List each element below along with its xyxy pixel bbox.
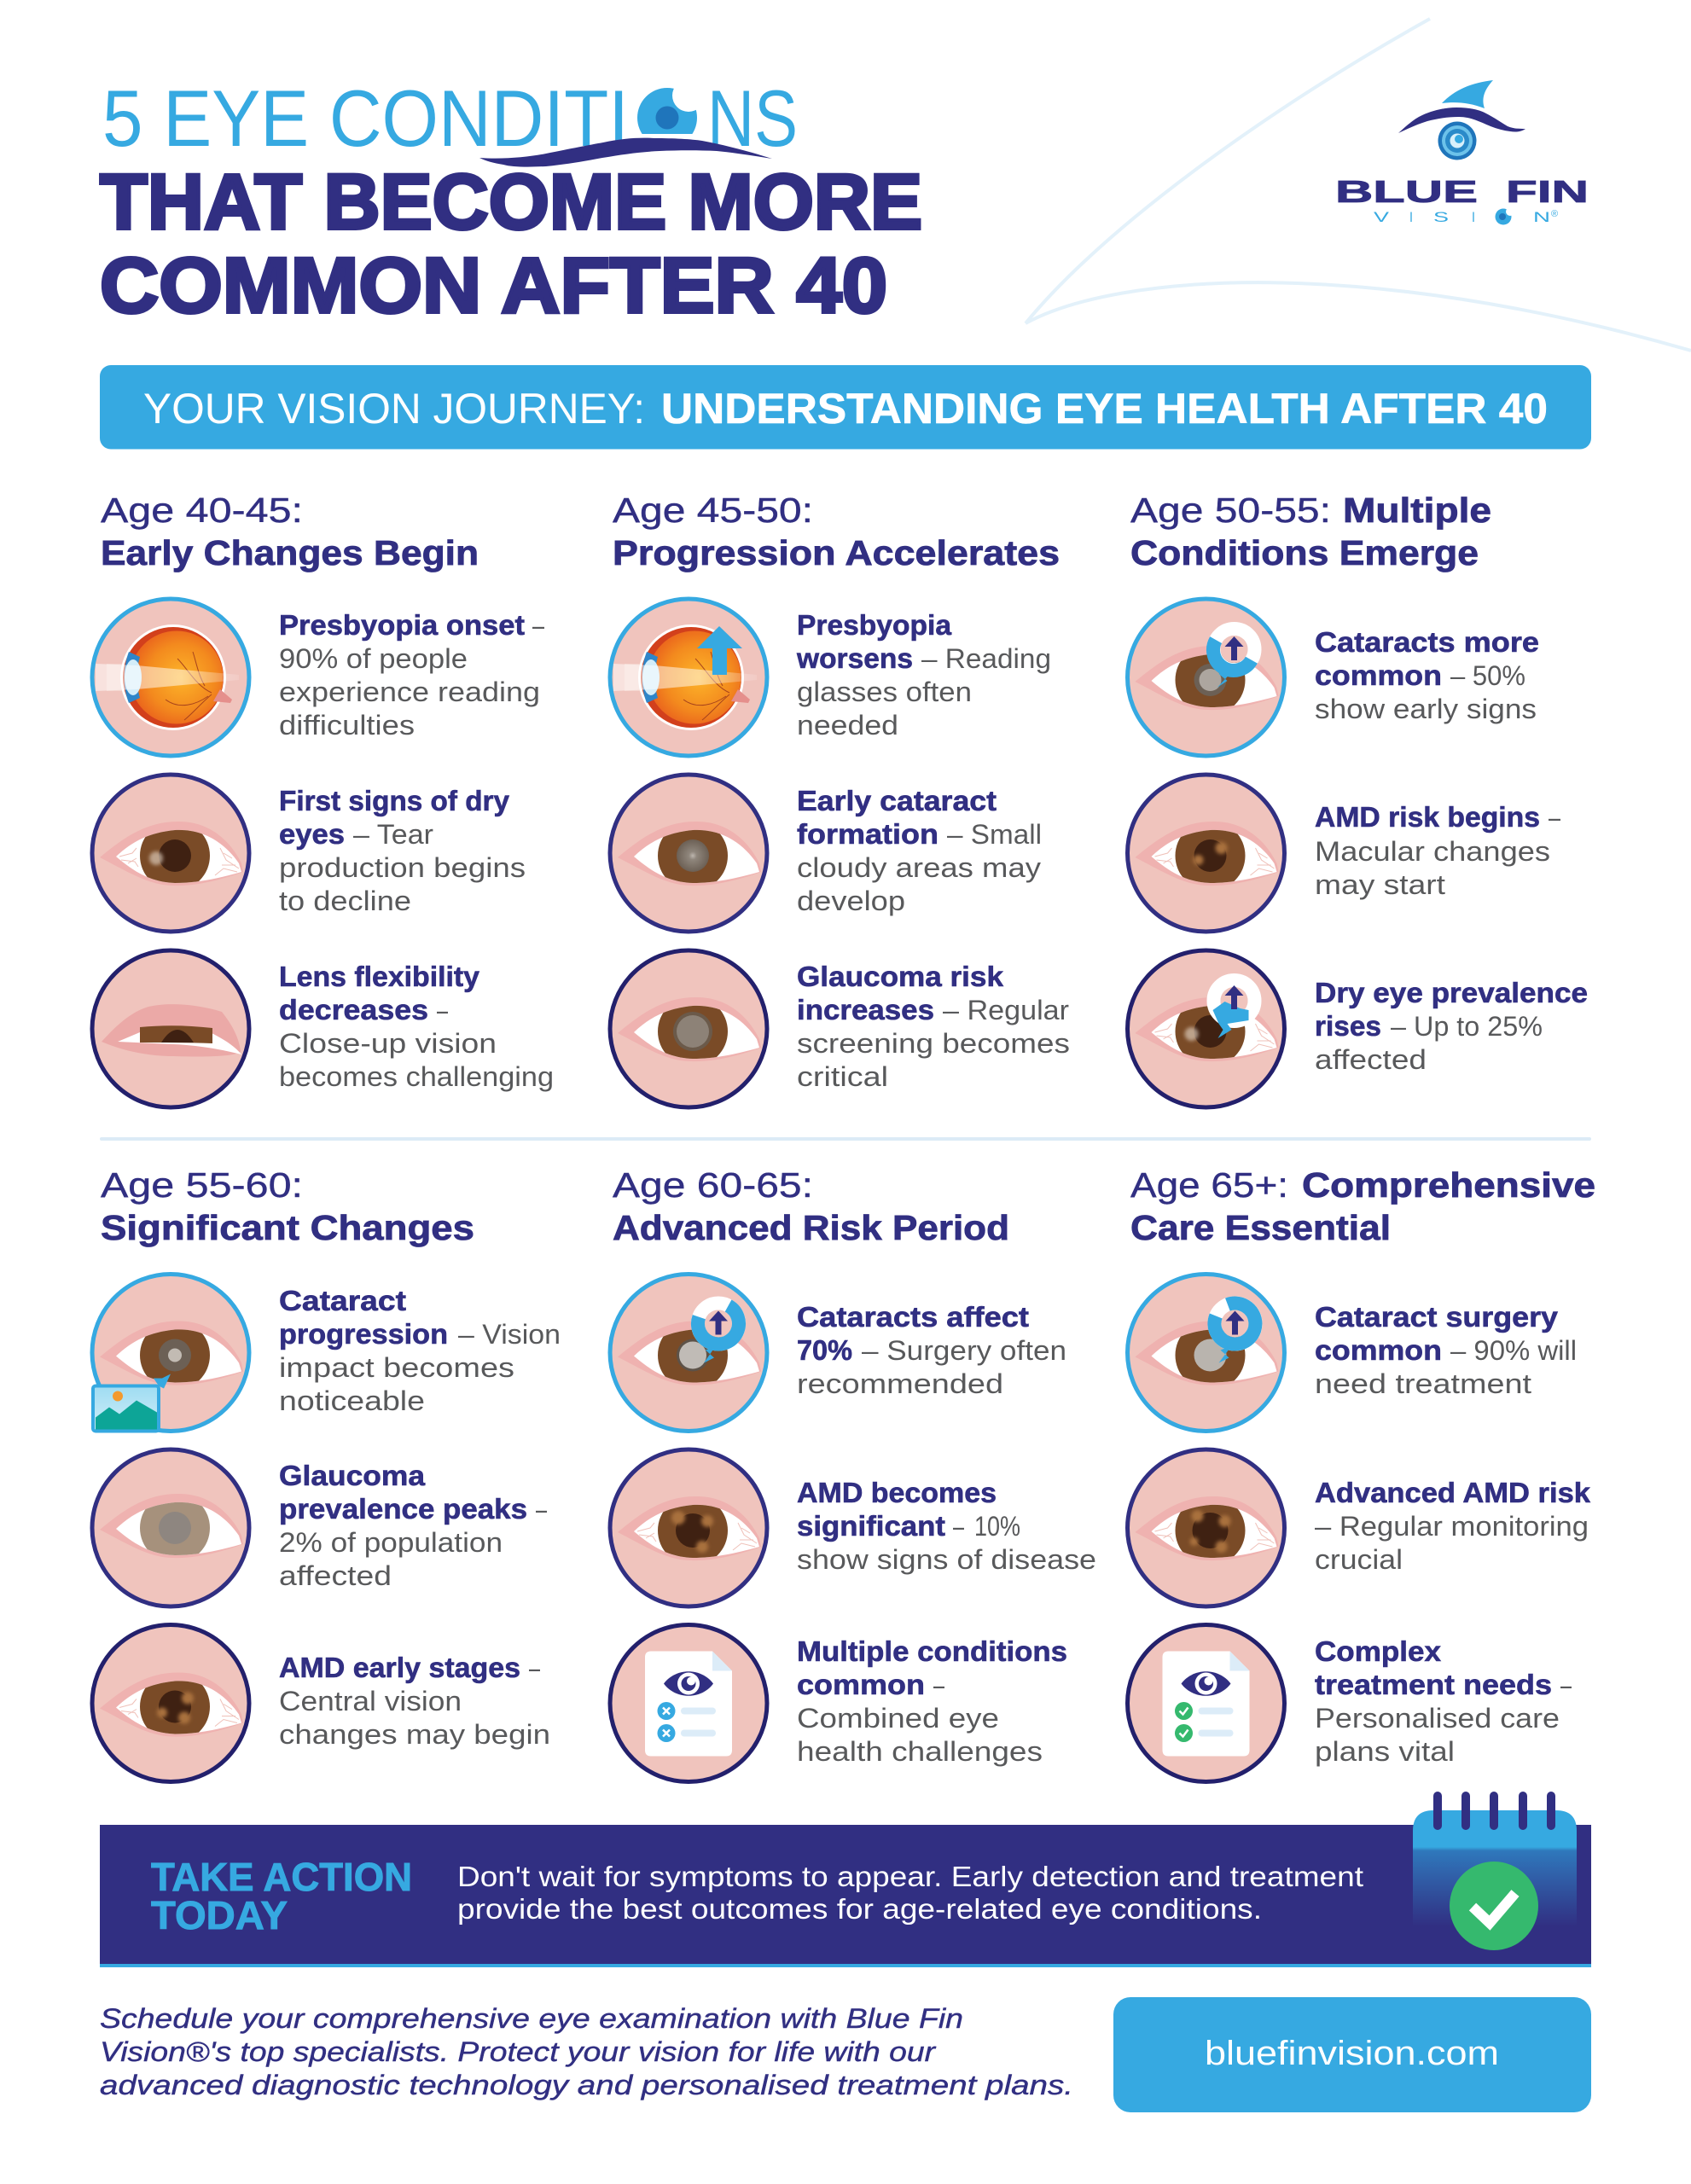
heading bbox=[613, 491, 1060, 572]
icon: cataract eye with 90 percent ring bbox=[1128, 1275, 1285, 1432]
text: cataract surgery common: common bbox=[1315, 1334, 1442, 1366]
panel: age 65+ bbox=[1128, 1165, 1595, 1781]
text: advanced AMD risk: crucial bbox=[1315, 1544, 1403, 1575]
heading: Early Changes Begin bbox=[101, 533, 479, 572]
panel: age 40-45 bbox=[92, 491, 554, 1107]
text: cataract surgery common: – 90% will bbox=[1450, 1335, 1577, 1366]
text: lens flexibility decreases: – bbox=[437, 995, 448, 1025]
text: presbyopia onset: 90% of people bbox=[279, 643, 468, 674]
text: first signs of dry eyes: – Tear bbox=[353, 819, 433, 850]
text: cataracts more common: Cataracts more bbox=[1315, 626, 1539, 658]
text: presbyopia onset: experience reading bbox=[279, 677, 540, 707]
text: call to action message: provide the best outcomes for age-related eye conditions. bbox=[457, 1893, 1262, 1925]
icon: half-closed eye bbox=[92, 950, 249, 1107]
icon: calendar with check bbox=[1413, 1796, 1577, 1950]
text: AMD risk begins: Macular changes bbox=[1315, 836, 1550, 867]
icon: iris bbox=[1438, 121, 1476, 160]
text: call to action message bbox=[457, 1861, 1363, 1925]
heading: Age 50-55: bbox=[1130, 491, 1331, 530]
text: glaucoma risk increases: screening becomes bbox=[797, 1028, 1070, 1059]
text: AMD risk begins: AMD risk begins bbox=[1315, 801, 1540, 833]
logo: Blue Fin Vision: I bbox=[1409, 209, 1413, 225]
text: cataracts more common: show early signs bbox=[1315, 694, 1537, 724]
text: glaucoma risk increases: increases bbox=[797, 994, 934, 1025]
logo: Blue Fin Vision bbox=[1335, 80, 1589, 225]
title: NS bbox=[707, 73, 798, 163]
icon: blurred picture inset bbox=[93, 1385, 159, 1432]
heading: Comprehensive bbox=[1302, 1165, 1595, 1205]
icon: AMD risk eye bbox=[1128, 775, 1285, 932]
text: multiple conditions common bbox=[797, 1635, 1067, 1767]
icon: cataract eye with 50 percent ring bbox=[1128, 599, 1285, 756]
logo: Blue Fin Vision: I bbox=[1472, 209, 1475, 225]
text: AMD becomes significant: – bbox=[953, 1511, 964, 1542]
icon: cataract eye with 70 percent ring bbox=[610, 1275, 767, 1432]
text: presbyopia worsens: worsens bbox=[796, 642, 913, 674]
text: early cataract formation: Early cataract bbox=[797, 785, 997, 816]
banner: UNDERSTANDING EYE HEALTH AFTER 40 bbox=[661, 385, 1548, 433]
text: schedule examination: Vision®'s top specialists. Protect your vision for life with our bbox=[100, 2036, 937, 2067]
text: presbyopia worsens: needed bbox=[797, 710, 898, 741]
text: lens flexibility decreases bbox=[279, 961, 554, 1092]
text: cataract progression bbox=[279, 1285, 561, 1416]
text: dry eye prevalence rises bbox=[1315, 977, 1588, 1075]
text: multiple conditions common: – bbox=[933, 1670, 944, 1700]
logo: Blue Fin Vision: S bbox=[1433, 209, 1449, 225]
heading: Age 45-50: bbox=[613, 491, 813, 530]
text: cataract progression: impact becomes bbox=[279, 1352, 514, 1383]
heading: Age 60-65: bbox=[613, 1165, 813, 1205]
icon: brow bbox=[1398, 107, 1525, 133]
text: presbyopia onset: difficulties bbox=[279, 710, 415, 741]
title wave bbox=[479, 138, 772, 167]
text: glaucoma prevalence peaks: Glaucoma bbox=[279, 1460, 426, 1491]
text: dry eye prevalence rises: Dry eye prevalence bbox=[1315, 977, 1588, 1008]
logo: Blue Fin Vision: FIN bbox=[1506, 174, 1589, 209]
heading bbox=[613, 1165, 1009, 1247]
text: glaucoma prevalence peaks: affected bbox=[279, 1560, 392, 1591]
text: glaucoma prevalence peaks: – bbox=[536, 1494, 547, 1525]
heading: take action today: TAKE ACTION bbox=[151, 1855, 412, 1899]
text: dry eye prevalence rises: – Up to 25% bbox=[1391, 1011, 1543, 1042]
heading: Age 40-45: bbox=[101, 491, 303, 530]
heading: Age 65+: bbox=[1130, 1165, 1288, 1205]
text: advanced AMD risk: – Regular monitoring bbox=[1315, 1511, 1589, 1542]
text: dry eye prevalence rises: rises bbox=[1315, 1010, 1381, 1042]
text: first signs of dry eyes: First signs of dry bbox=[279, 785, 510, 816]
text: cataracts more common: – 50% bbox=[1450, 660, 1525, 691]
icon: glaucoma risk eye bbox=[610, 950, 767, 1107]
text: glaucoma risk increases: critical bbox=[797, 1061, 888, 1092]
heading: Significant Changes bbox=[101, 1208, 474, 1247]
icon: anatomical eye with arrow bbox=[610, 599, 767, 756]
icon: droplet eye in title bbox=[633, 79, 705, 148]
text: cataract progression: – Vision bbox=[458, 1319, 561, 1350]
button: website: bluefinvision.com bbox=[1205, 2035, 1499, 2072]
text: cataracts affect 70%: recommended bbox=[797, 1368, 1003, 1399]
title: THAT BECOME MORE bbox=[100, 159, 922, 246]
logo: Blue Fin Vision: BLUE bbox=[1335, 174, 1478, 209]
text: early cataract formation bbox=[797, 785, 1042, 916]
heading: Advanced Risk Period bbox=[613, 1208, 1009, 1247]
text: glaucoma risk increases bbox=[797, 961, 1070, 1092]
text: AMD early stages: Central vision bbox=[279, 1686, 462, 1716]
text: cataracts affect 70%: – Surgery often bbox=[862, 1335, 1066, 1366]
title bbox=[100, 73, 922, 329]
text: cataract progression: noticeable bbox=[279, 1385, 425, 1416]
text: complex treatment needs bbox=[1315, 1635, 1572, 1767]
text: lens flexibility decreases: becomes challenging bbox=[279, 1061, 554, 1092]
text: glaucoma risk increases: – Regular bbox=[943, 995, 1069, 1025]
logo: Blue Fin Vision: ® bbox=[1551, 209, 1558, 219]
text: glaucoma risk increases: Glaucoma risk bbox=[797, 961, 1004, 992]
heading: Conditions Emerge bbox=[1130, 533, 1479, 572]
icon: AMD early stages eye bbox=[92, 1624, 249, 1781]
text: cataracts affect 70%: Cataracts affect bbox=[797, 1301, 1029, 1333]
text: cataracts affect 70%: 70% bbox=[797, 1334, 852, 1366]
text: cataracts more common: common bbox=[1315, 659, 1442, 691]
heading bbox=[1130, 491, 1491, 572]
title: COMMON AFTER 40 bbox=[100, 242, 887, 329]
icon: AMD significant eye bbox=[610, 1449, 767, 1606]
text: multiple conditions common: Combined eye bbox=[797, 1703, 999, 1734]
text: cataract progression: Cataract bbox=[279, 1285, 406, 1316]
text: cataract surgery common: need treatment bbox=[1315, 1368, 1531, 1399]
logo: Blue Fin Vision: N bbox=[1533, 209, 1550, 225]
text: AMD becomes significant: AMD becomes bbox=[797, 1477, 997, 1508]
text: presbyopia onset: Presbyopia onset bbox=[279, 609, 525, 641]
text: early cataract formation: cloudy areas may bbox=[797, 852, 1041, 883]
text: complex treatment needs: Complex bbox=[1315, 1635, 1442, 1667]
text: presbyopia onset: – bbox=[532, 610, 544, 641]
panel: age 60-65 bbox=[610, 1165, 1096, 1781]
text: presbyopia worsens: glasses often bbox=[797, 677, 972, 707]
text: cataracts more common bbox=[1315, 626, 1539, 724]
text: complex treatment needs: plans vital bbox=[1315, 1736, 1455, 1767]
icon: fin bbox=[1442, 80, 1493, 108]
panel: age 45-50 bbox=[610, 491, 1070, 1107]
text: cataracts affect 70% bbox=[797, 1301, 1066, 1399]
text: glaucoma prevalence peaks: 2% of population bbox=[279, 1527, 503, 1558]
heading: take action today bbox=[151, 1855, 412, 1937]
text: complex treatment needs: treatment needs bbox=[1315, 1669, 1552, 1700]
text: presbyopia worsens: Presbyopia bbox=[797, 609, 952, 641]
text: early cataract formation: formation bbox=[797, 818, 938, 850]
text: schedule examination bbox=[100, 2003, 1073, 2100]
text: lens flexibility decreases: Close-up vision bbox=[279, 1028, 497, 1059]
panel: age 55-60 bbox=[92, 1165, 561, 1781]
text: glaucoma prevalence peaks: prevalence peaks bbox=[279, 1493, 527, 1525]
text: AMD becomes significant: 10% bbox=[974, 1511, 1020, 1542]
heading bbox=[101, 1165, 474, 1247]
text: AMD early stages: changes may begin bbox=[279, 1719, 550, 1750]
text: glaucoma prevalence peaks bbox=[279, 1460, 547, 1591]
heading: Multiple bbox=[1343, 491, 1491, 530]
text: AMD early stages: – bbox=[529, 1653, 540, 1683]
icon: glaucoma prevalence eye bbox=[92, 1449, 249, 1606]
text: first signs of dry eyes: eyes bbox=[279, 818, 345, 850]
title: O bbox=[646, 81, 689, 144]
text: schedule examination: Schedule your comprehensive eye examination with Blue Fin bbox=[100, 2003, 963, 2034]
text: complex treatment needs: – bbox=[1560, 1670, 1572, 1700]
text: advanced AMD risk bbox=[1315, 1477, 1591, 1575]
text: AMD early stages bbox=[279, 1652, 550, 1750]
text: first signs of dry eyes bbox=[279, 785, 526, 916]
text: early cataract formation: develop bbox=[797, 886, 905, 916]
icon: eye report with checks bbox=[1128, 1624, 1285, 1781]
text: schedule examination: advanced diagnostic technology and personalised treatment plans. bbox=[100, 2070, 1073, 2100]
text: lens flexibility decreases: decreases bbox=[279, 994, 428, 1025]
text: first signs of dry eyes: to decline bbox=[279, 886, 411, 916]
text: cataract progression: progression bbox=[279, 1318, 448, 1350]
text: AMD risk begins: – bbox=[1549, 802, 1560, 833]
text: call to action message: Don't wait for symptoms to appear. Early detection and treatment bbox=[457, 1861, 1363, 1892]
text: presbyopia worsens bbox=[796, 609, 1051, 741]
text: presbyopia worsens: – Reading bbox=[921, 643, 1051, 674]
icon: cataract progression eye with picture bbox=[92, 1275, 249, 1432]
heading bbox=[1130, 1165, 1595, 1247]
text: multiple conditions common: health challenges bbox=[797, 1736, 1043, 1767]
heading: Progression Accelerates bbox=[613, 533, 1060, 572]
heading bbox=[101, 491, 479, 572]
text: lens flexibility decreases: Lens flexibility bbox=[279, 961, 480, 992]
text: complex treatment needs: Personalised care bbox=[1315, 1703, 1560, 1734]
text: dry eye prevalence rises: affected bbox=[1315, 1044, 1427, 1075]
text: AMD risk begins: may start bbox=[1315, 869, 1445, 900]
text: multiple conditions common: common bbox=[797, 1669, 925, 1700]
text: multiple conditions common: Multiple conditions bbox=[797, 1635, 1067, 1667]
panel: age 50-55 bbox=[1128, 491, 1588, 1107]
text: AMD becomes significant bbox=[797, 1477, 1096, 1575]
text: cataract surgery common: Cataract surgery bbox=[1315, 1301, 1559, 1333]
text: AMD early stages: AMD early stages bbox=[279, 1652, 520, 1683]
text: advanced AMD risk: Advanced AMD risk bbox=[1315, 1477, 1591, 1508]
heading: take action today: TODAY bbox=[151, 1893, 288, 1937]
icon: eye report with crosses bbox=[610, 1624, 767, 1781]
text: early cataract formation: – Small bbox=[947, 819, 1042, 850]
logo: Blue Fin Vision: V bbox=[1374, 209, 1390, 225]
banner bbox=[100, 365, 1591, 449]
icon: dry eye with ring bbox=[1128, 950, 1285, 1107]
icon: advanced AMD eye bbox=[1128, 1449, 1285, 1606]
text: AMD becomes significant: show signs of disease bbox=[797, 1544, 1096, 1575]
title: 5 EYE CONDITI bbox=[102, 73, 629, 163]
banner: YOUR VISION JOURNEY: bbox=[143, 385, 645, 433]
icon: early cataract eye bbox=[610, 775, 767, 932]
button: website bbox=[1113, 1997, 1591, 2112]
icon: dry eye bbox=[92, 775, 249, 932]
heading: Age 55-60: bbox=[101, 1165, 303, 1205]
panel: take action bar bbox=[100, 1796, 1591, 1967]
icon: anatomical eye bbox=[92, 599, 249, 756]
text: AMD becomes significant: significant bbox=[797, 1510, 945, 1542]
text: first signs of dry eyes: production begins bbox=[279, 852, 526, 883]
text: cataract surgery common bbox=[1315, 1301, 1577, 1399]
heading: Care Essential bbox=[1130, 1208, 1391, 1247]
decorative sail lines bbox=[1026, 19, 1691, 351]
text: presbyopia onset bbox=[279, 609, 544, 741]
text: AMD risk begins bbox=[1315, 801, 1560, 900]
